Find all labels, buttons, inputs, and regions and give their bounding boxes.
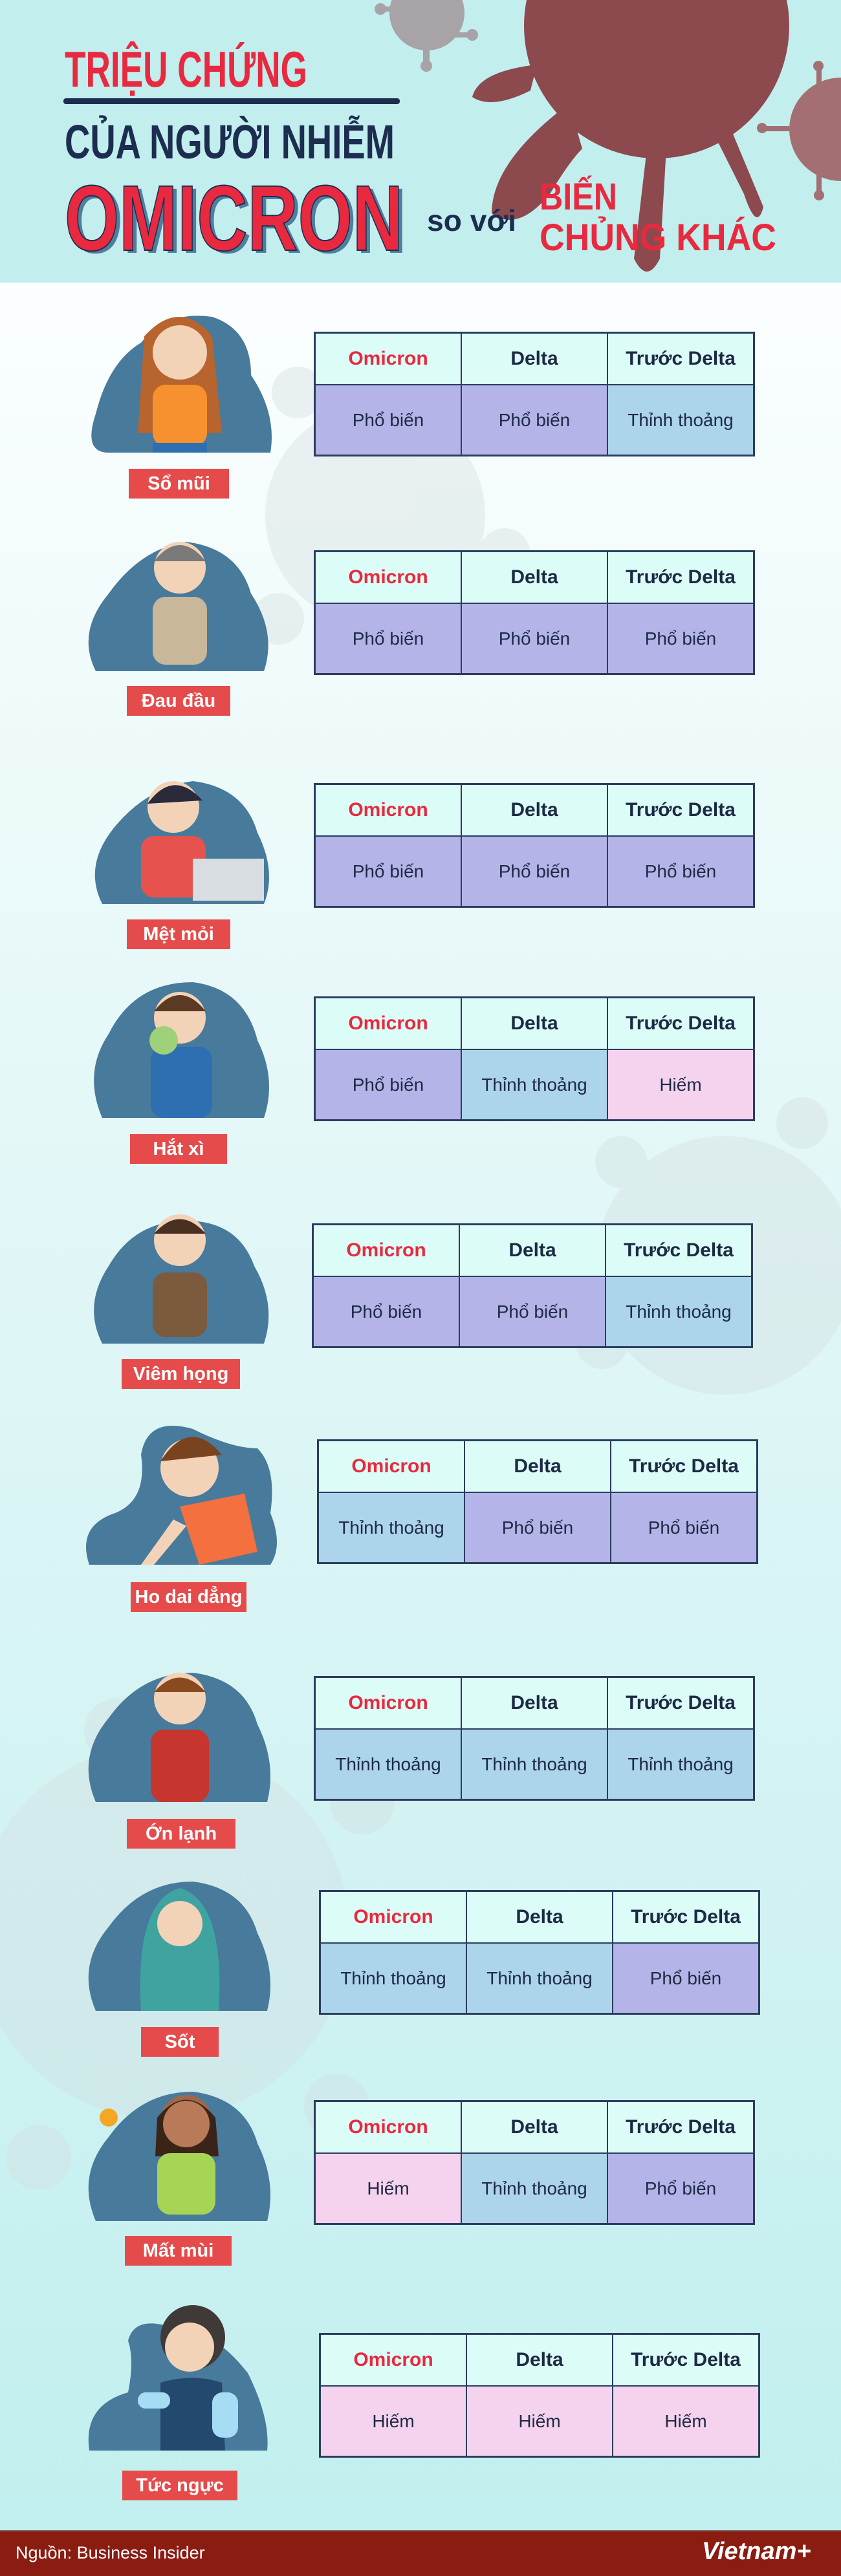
table: Đau đầu: Phổ biến: [499, 628, 570, 648]
table: Sổ mũi: [314, 332, 755, 456]
title: TRIỆU CHỨNG: [65, 41, 307, 98]
label: Đau đầu: Đau đầu: [142, 691, 215, 711]
table: Sổ mũi: Delta: [510, 348, 558, 369]
table: Mệt mỏi: Omicron: [348, 799, 428, 821]
table: Hắt xì: Omicron: [348, 1013, 428, 1034]
table: Đau đầu: Delta: [510, 566, 558, 588]
table: Sổ mũi: Phổ biến: [499, 410, 570, 429]
table: Viêm họng: Phổ biến: [351, 1301, 422, 1322]
table: Hắt xì: Thỉnh thoảng: [481, 1075, 587, 1094]
label: Tức ngực: [122, 2471, 237, 2500]
label: Ho dai dẳng: [131, 1582, 246, 1612]
table: Viêm họng: Omicron: [346, 1240, 426, 1261]
table: Hắt xì: Delta: [510, 1013, 558, 1034]
table: Sổ mũi: Phổ biến: [353, 410, 424, 429]
table: Sốt: Thỉnh thoảng: [340, 1968, 446, 1988]
table: Ớn lạnh: Thỉnh thoảng: [335, 1754, 441, 1774]
table: Sốt: Thỉnh thoảng: [486, 1968, 593, 1988]
row 4: Hắt xì: [94, 982, 755, 1164]
table: Mệt mỏi: [314, 783, 755, 908]
table: Ớn lạnh: Thỉnh thoảng: [628, 1754, 734, 1774]
title: [63, 41, 776, 273]
label: Ớn lạnh: [127, 1819, 235, 1849]
table: Đau đầu: Phổ biến: [353, 628, 424, 648]
table: Mệt mỏi: Trước Delta: [626, 799, 736, 821]
table: Ho dai dẳng: Trước Delta: [629, 1455, 739, 1477]
table: Ho dai dẳng: Omicron: [351, 1455, 431, 1477]
table: Sốt: Delta: [516, 1906, 563, 1927]
label: Mệt mỏi: Mệt mỏi: [143, 923, 214, 944]
table: Ho dai dẳng: Delta: [514, 1455, 562, 1477]
header: [0, 0, 841, 283]
label: Viêm họng: Viêm họng: [133, 1363, 228, 1384]
row 1: Sổ mũi: [91, 316, 755, 499]
table: Mất mùi: Trước Delta: [626, 2116, 736, 2138]
table: Ho dai dẳng: Thỉnh thoảng: [338, 1517, 444, 1538]
table: Tức ngực: Delta: [516, 2349, 563, 2370]
table: Sổ mũi: Thỉnh thoảng: [628, 410, 734, 429]
row 9: Mất mùi: [88, 2092, 755, 2266]
label: Sốt: Sốt: [165, 2032, 195, 2052]
table: Viêm họng: Thỉnh thoảng: [626, 1301, 732, 1322]
row 2: Đau đầu: [88, 542, 755, 716]
table: Sổ mũi: Trước Delta: [626, 348, 736, 369]
label: Hắt xì: [130, 1134, 227, 1164]
table: Ớn lạnh: Delta: [510, 1692, 558, 1713]
row 7: Ớn lạnh: [88, 1673, 755, 1849]
label: Ớn lạnh: Ớn lạnh: [146, 1823, 217, 1844]
table: Mất mùi: Thỉnh thoảng: [481, 2178, 587, 2198]
logo: Vietnam+: Vietnam+: [702, 2538, 811, 2565]
table: Viêm họng: Trước Delta: [624, 1240, 734, 1261]
label: Đau đầu: [127, 686, 230, 716]
illustration: fever: [88, 1882, 270, 2011]
label: Tức ngực: Tức ngực: [136, 2475, 224, 2496]
table: Mệt mỏi: Delta: [510, 799, 558, 821]
label: Mệt mỏi: [127, 919, 230, 949]
illustration: headache: [88, 542, 268, 671]
table: Tức ngực: Hiếm: [664, 2410, 707, 2431]
table: Đau đầu: Trước Delta: [626, 566, 736, 588]
table: Sốt: Phổ biến: [650, 1968, 721, 1988]
label: Ho dai dẳng: Ho dai dẳng: [135, 1587, 242, 1607]
table: Sốt: Trước Delta: [631, 1906, 741, 1927]
label: Mất mùi: Mất mùi: [143, 2240, 213, 2260]
table: Tức ngực: Hiếm: [372, 2410, 415, 2431]
illustration: sore throat: [94, 1214, 269, 1344]
table: Hắt xì: [314, 996, 755, 1121]
row 6: Ho dai dẳng: [86, 1426, 758, 1612]
title: BIẾN: [540, 176, 617, 218]
title: CHỦNG KHÁC: [540, 217, 776, 259]
table: Ớn lạnh: [314, 1676, 755, 1801]
label: Mất mùi: [125, 2236, 232, 2266]
table: Ho dai dẳng: [317, 1439, 758, 1564]
table: Đau đầu: [314, 550, 755, 675]
label: Hắt xì: Hắt xì: [153, 1138, 204, 1159]
row 5: Viêm họng: [94, 1214, 753, 1389]
table: Tức ngực: Hiếm: [518, 2410, 561, 2431]
table: Sốt: [319, 1890, 760, 2015]
table: Đau đầu: Phổ biến: [645, 628, 716, 648]
illustration: fatigue: [94, 781, 269, 904]
table: Ớn lạnh: Omicron: [348, 1692, 428, 1713]
table: Hắt xì: Trước Delta: [626, 1013, 736, 1034]
label: Sổ mũi: Sổ mũi: [147, 473, 210, 494]
table: Đau đầu: Omicron: [348, 566, 428, 588]
virus decorations: [375, 0, 841, 272]
illustration: sneezing: [94, 982, 269, 1118]
table: Tức ngực: [319, 2333, 760, 2458]
table: Ho dai dẳng: Phổ biến: [502, 1517, 573, 1538]
table: Mất mùi: Delta: [510, 2116, 558, 2138]
table: Mệt mỏi: Phổ biến: [353, 861, 424, 881]
table: Mất mùi: Phổ biến: [645, 2178, 716, 2198]
table: Ho dai dẳng: Phổ biến: [648, 1517, 719, 1538]
table: Tức ngực: Omicron: [353, 2349, 433, 2370]
title: OMICRON: [69, 169, 407, 273]
table: Hắt xì: Hiếm: [659, 1075, 702, 1094]
table: Sổ mũi: Omicron: [348, 348, 428, 369]
table: Mất mùi: [314, 2100, 755, 2225]
illustration: chest pain: [88, 2305, 268, 2451]
illustration: persistent cough: [86, 1426, 277, 1565]
table: Tức ngực: Trước Delta: [631, 2349, 741, 2370]
label: Sốt: [141, 2027, 219, 2057]
table: Ớn lạnh: Thỉnh thoảng: [481, 1754, 587, 1774]
table: Viêm họng: [312, 1223, 753, 1348]
row 10: Tức ngực: [88, 2305, 760, 2500]
table: Mất mùi: Hiếm: [367, 2178, 410, 2198]
table: Mệt mỏi: Phổ biến: [645, 861, 716, 881]
table: Viêm họng: Delta: [508, 1240, 556, 1261]
source text: Nguồn: Business Insider: [16, 2543, 205, 2562]
row 3: Mệt mỏi: [94, 781, 755, 949]
label: Sổ mũi: [129, 469, 229, 499]
label: Viêm họng: [122, 1359, 240, 1389]
illustration: chills: [88, 1673, 270, 1802]
footer: [0, 2530, 841, 2576]
table: Viêm họng: Phổ biến: [497, 1301, 568, 1322]
table: Mất mùi: Omicron: [348, 2116, 428, 2138]
title: CỦA NGƯỜI NHIỄM: [65, 115, 395, 169]
table: Hắt xì: Phổ biến: [353, 1075, 424, 1094]
title: so với: [427, 204, 516, 237]
table: Ớn lạnh: Trước Delta: [626, 1692, 736, 1713]
title: OMICRON: [65, 166, 403, 270]
table: Sốt: Omicron: [353, 1906, 433, 1927]
illustration: loss of smell: [88, 2092, 270, 2221]
table: Mệt mỏi: Phổ biến: [499, 861, 570, 881]
illustration: runny nose: [91, 316, 272, 453]
row 8: Sốt: [88, 1882, 760, 2057]
